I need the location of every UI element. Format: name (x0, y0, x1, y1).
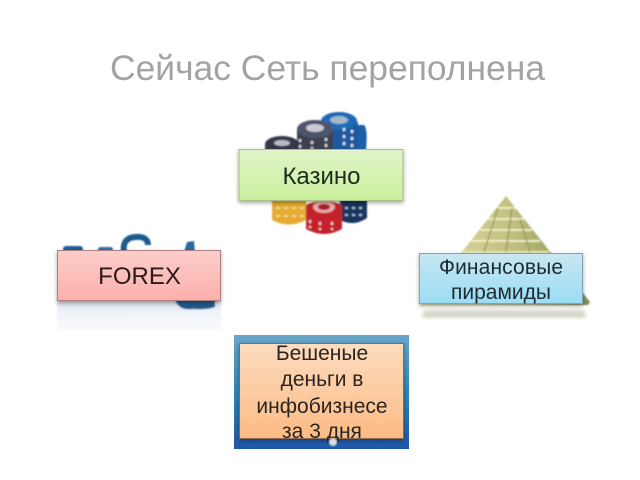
label box: Бешеные деньги: инфобизнесе (256, 395, 388, 418)
panel: pyramids (420, 196, 590, 318)
label box: Бешеные деньги (240, 342, 404, 443)
icon: currency symbols (57, 237, 221, 331)
label box: Казино: Казино (282, 163, 361, 190)
label box: Бешеные деньги: деньги в (281, 368, 363, 391)
label box: Бешеные деньги: Бешеные (276, 342, 368, 365)
icon: casino chips (265, 112, 367, 234)
panel: infobusiness (234, 335, 409, 449)
icon: light spot (329, 438, 337, 446)
label box: FOREX (58, 250, 220, 300)
image: sea background (234, 335, 409, 449)
label box: FOREX: FOREX (98, 263, 181, 290)
panel: casino (239, 112, 403, 234)
panel: forex (57, 237, 221, 331)
title: Сейчас Сеть переполнена (110, 49, 546, 88)
label box: Бешеные деньги: за 3 дня (282, 420, 362, 443)
label box: Финансовые пирамиды (420, 254, 582, 304)
label box: Казино (239, 150, 403, 200)
icon: money pyramid (420, 196, 590, 318)
label box: Финансовые пирамиды: Финансовые (439, 256, 563, 279)
label box: Финансовые пирамиды: пирамиды (451, 281, 551, 304)
